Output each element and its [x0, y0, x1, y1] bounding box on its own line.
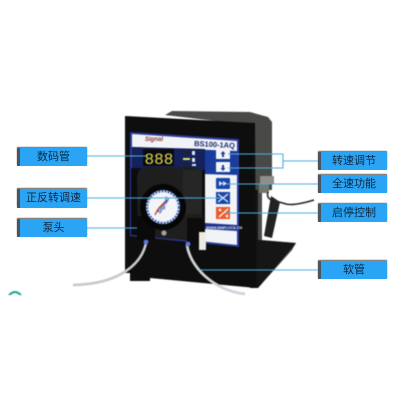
label: 启停控制: 启停控制	[332, 207, 376, 219]
rotor dial: Signal	[157, 196, 171, 215]
pump head	[137, 167, 204, 244]
label: 转速调节: 转速调节	[332, 155, 376, 167]
seven segment display: 888	[144, 151, 173, 169]
label: 数码管	[17, 148, 87, 166]
tube clamp	[199, 232, 206, 250]
label: 软管: 软管	[343, 264, 365, 276]
website strip: WWW.BMFLVCS.CN	[206, 226, 242, 230]
button: speed down	[216, 162, 230, 172]
label: 全速功能	[318, 175, 387, 193]
teal arc mark	[8, 291, 22, 295]
button: direction	[216, 192, 230, 204]
label: 泵头: 泵头	[42, 222, 64, 234]
right tube	[186, 242, 245, 294]
button: start stop	[216, 207, 230, 219]
indicator lights	[183, 151, 196, 166]
label: 数码管: 数码管	[37, 151, 70, 163]
label: 转速调节	[318, 152, 387, 170]
callout lines	[87, 154, 318, 270]
button: full speed	[216, 178, 230, 189]
label: 泵头	[17, 219, 87, 237]
label: 正反转调速	[17, 189, 87, 208]
screw	[161, 230, 167, 236]
control panel	[130, 132, 242, 247]
label: 全速功能: 全速功能	[332, 178, 376, 190]
cable sensor	[264, 192, 314, 238]
pump front face	[125, 116, 256, 288]
brand logo: Signal	[145, 137, 163, 143]
left tube	[73, 240, 148, 285]
button: speed up	[216, 150, 230, 159]
label: 启停控制	[318, 204, 387, 222]
label: 软管	[318, 261, 387, 279]
pump rear housing	[165, 111, 296, 288]
lower dark panel behind pump head	[131, 168, 205, 241]
label: 正反转调速: 正反转调速	[26, 192, 81, 204]
model name: BS100-1AQ	[194, 139, 235, 150]
